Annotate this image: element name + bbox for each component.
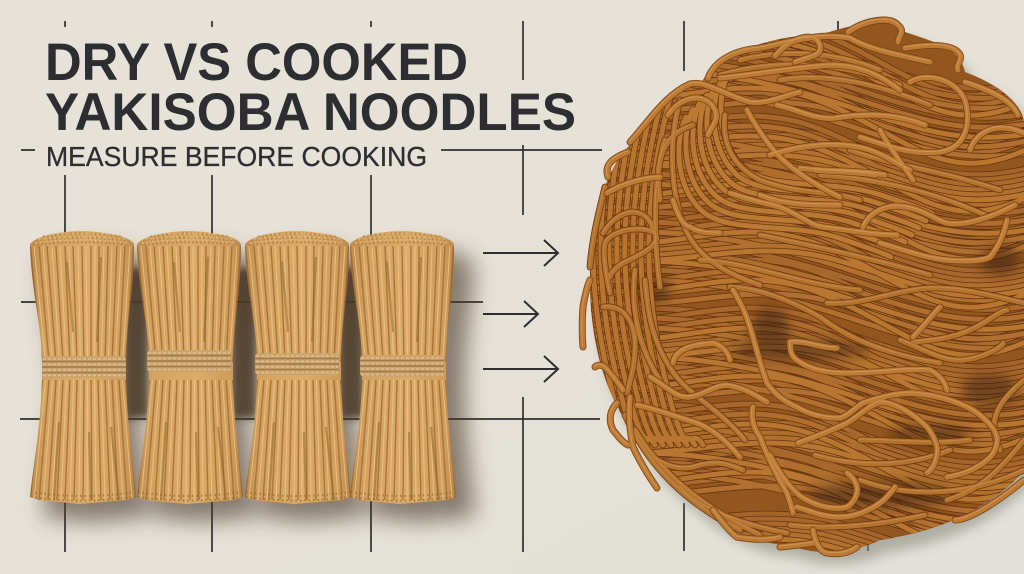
subtitle: MEASURE BEFORE COOKING	[46, 141, 427, 172]
shadow under cooked noodles	[598, 34, 1024, 564]
shadow under dry bundles	[43, 249, 475, 522]
arrow: bottom	[483, 356, 558, 382]
dry bundle 1	[30, 231, 136, 504]
dark gaps between bundles	[125, 268, 364, 418]
arrow: top	[483, 240, 558, 266]
title line 1: DRY VS COOKED	[45, 33, 468, 92]
dry bundle 4	[350, 231, 456, 504]
title block	[45, 33, 576, 172]
measurement guide lines	[20, 21, 868, 552]
panel: cooked noodle mound	[560, 13, 1024, 574]
panel: dry noodle bundles	[30, 231, 456, 504]
dry bundle 3	[245, 231, 351, 504]
arrow: middle	[483, 301, 538, 327]
title line 2: YAKISOBA NOODLES	[45, 83, 576, 142]
dry bundle 2	[137, 231, 243, 504]
